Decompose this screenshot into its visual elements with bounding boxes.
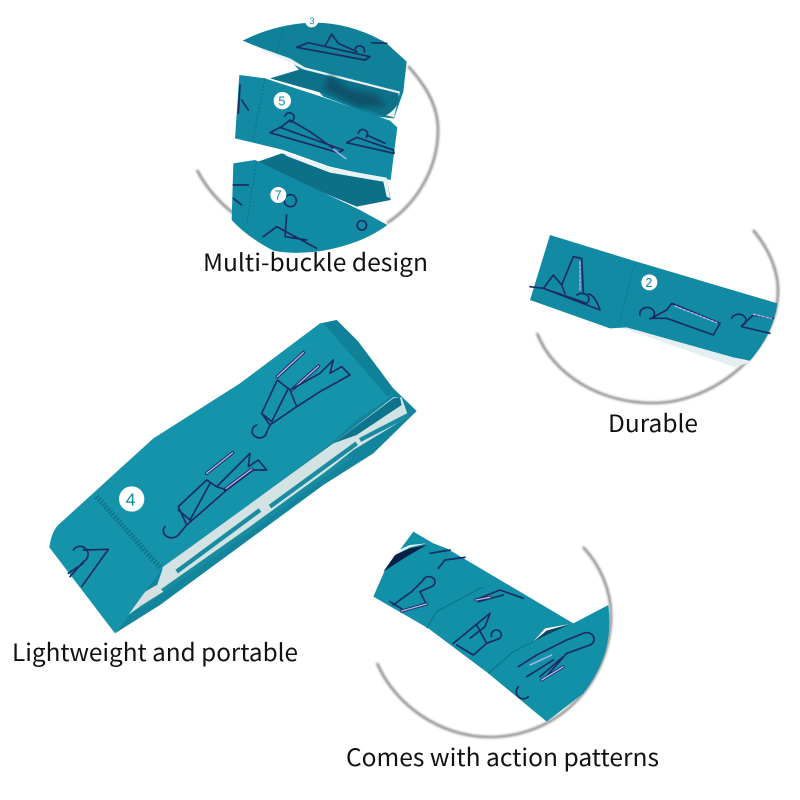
icon: badge 2: 2 xyxy=(645,276,652,290)
icon: badge 3: 3 xyxy=(309,16,315,26)
band coils xyxy=(232,14,407,253)
label: lightweight and portable: Lightweight and portable xyxy=(12,633,298,668)
band face xyxy=(49,320,393,633)
icon: badge 7 xyxy=(270,187,286,203)
circle edge shadow xyxy=(377,547,611,737)
icon: badge 2 xyxy=(641,274,657,290)
label: durable: Durable xyxy=(608,404,698,439)
slot gaps xyxy=(383,545,427,572)
icon: badge 4 xyxy=(119,486,144,512)
elastic band xyxy=(530,235,777,367)
panel: lightweight and portable xyxy=(12,320,417,668)
band end stitching xyxy=(323,320,394,397)
circle edge shadow xyxy=(537,230,778,403)
icon: badge 3 xyxy=(305,14,318,27)
circle edge shadow xyxy=(197,66,438,223)
icon: badge 4: 4 xyxy=(126,490,136,510)
icon: badge 5 xyxy=(274,92,291,109)
label: multi-buckle design: Multi-buckle design xyxy=(203,243,428,278)
panel: durable xyxy=(530,230,778,439)
folded band xyxy=(373,532,609,722)
back layers xyxy=(115,388,417,633)
panel: action patterns xyxy=(346,532,659,773)
panel: multi-buckle design xyxy=(197,14,438,278)
exercise figures xyxy=(68,353,350,587)
icon: badge 7: 7 xyxy=(275,189,282,203)
label: action patterns: Comes with action patterns xyxy=(346,738,659,773)
icon: badge 5: 5 xyxy=(278,94,285,108)
